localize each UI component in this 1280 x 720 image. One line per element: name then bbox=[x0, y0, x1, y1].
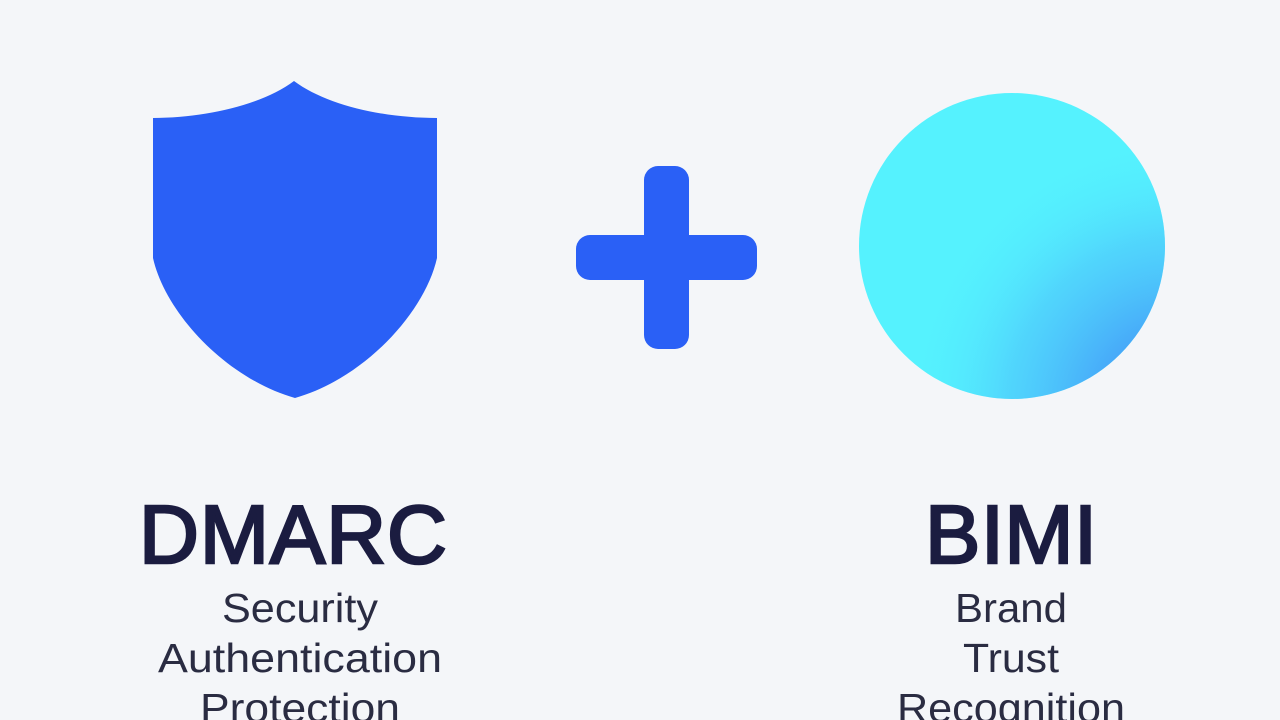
icon: plus bbox=[576, 166, 757, 349]
icon: shield bbox=[153, 81, 437, 398]
text block: DMARC attributes bbox=[158, 585, 442, 720]
text block: BIMI attributes: Brand bbox=[955, 585, 1067, 631]
text block: BIMI attributes: Trust bbox=[963, 635, 1060, 681]
text block: DMARC attributes: Security bbox=[222, 585, 379, 631]
text block: BIMI attributes bbox=[897, 585, 1125, 720]
heading: BIMI: BIMI bbox=[925, 488, 1097, 581]
heading: DMARC: DMARC bbox=[139, 488, 447, 581]
text block: DMARC attributes: Authentication bbox=[158, 635, 442, 681]
icon: gradient circle bbox=[859, 93, 1165, 399]
